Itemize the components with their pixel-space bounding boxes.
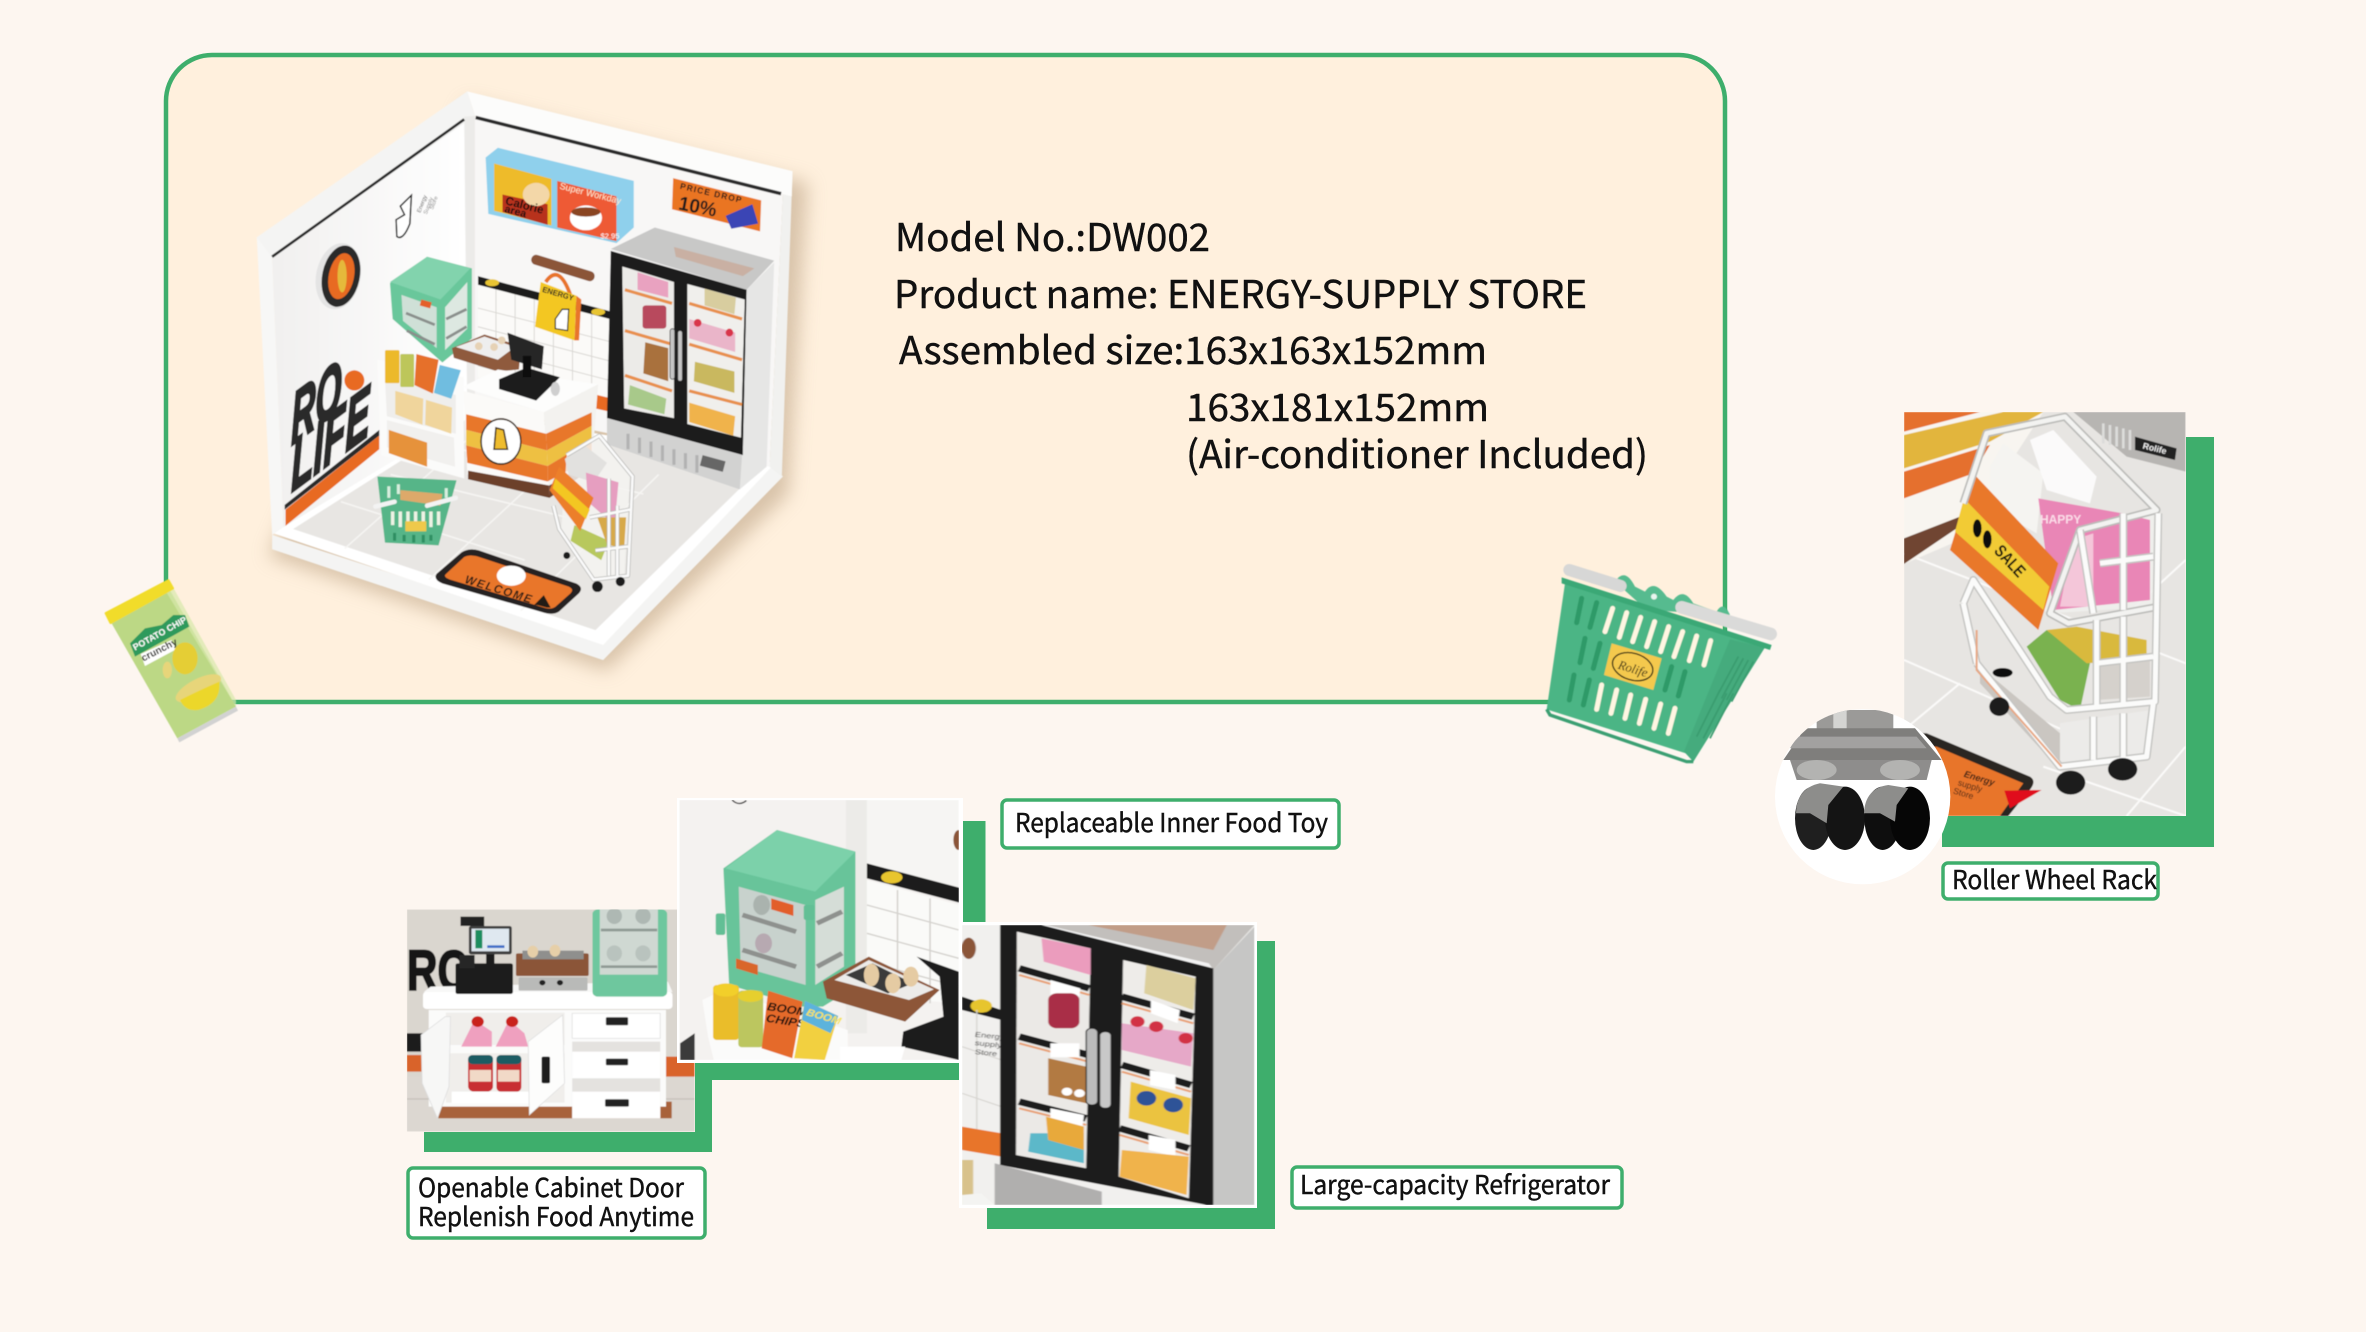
icon: potato chip can: crunchy [140, 637, 180, 664]
caption: cabinet door: Replenish Food Anytime [418, 1197, 694, 1234]
green frame [987, 941, 1275, 1229]
cart contents: SALE [1990, 541, 2030, 581]
white photo border [677, 798, 963, 1063]
shelf and snacks [702, 983, 848, 1060]
icon: green shopping basket: Rolife [1615, 658, 1650, 680]
wall clock [310, 239, 367, 314]
feature: openable cabinet door [407, 908, 712, 1238]
food warmer [390, 257, 472, 363]
green frame [1942, 437, 2214, 847]
RO LIFE lettering: LIFE [291, 369, 371, 508]
icon: green shopping basket [1547, 570, 1772, 762]
feature: large-capacity refrigerator [959, 922, 1622, 1229]
griddle on counter [516, 945, 589, 991]
caption: roller wheel rack: Roller Wheel Rack [1952, 860, 2158, 897]
photo: cabinet counter: RC [407, 939, 468, 1002]
green frame [424, 1063, 712, 1152]
welcome floor mat [436, 549, 581, 614]
floor mat: Energy [1963, 769, 1997, 788]
shelf unit with snacks [377, 350, 464, 478]
text block: product specifications [894, 207, 1648, 479]
lightbox signs: area [503, 203, 529, 221]
lightbox signs: $2.95 [600, 231, 620, 240]
griddle [823, 957, 940, 1022]
cart contents [1950, 430, 2157, 770]
shelf and snacks: BOOM [766, 1000, 809, 1019]
cash register [499, 333, 560, 401]
product name: Product name: ENERGY-SUPPLY STORE [894, 264, 1587, 319]
tiled wall band [478, 276, 613, 412]
rolling rack cart [550, 436, 633, 592]
wall logo: Energy [417, 194, 429, 214]
shopping basket [375, 477, 457, 545]
caption: cabinet door: Openable Cabinet Door [418, 1168, 685, 1205]
wall logo: Supply [423, 197, 435, 215]
hook rail [536, 260, 590, 276]
photo: rolling rack [1904, 412, 2186, 816]
RO LIFE lettering [291, 344, 371, 508]
wall logo: Store [429, 196, 440, 211]
griddle tray [452, 335, 521, 371]
shelf and snacks: BOOM [805, 1007, 844, 1028]
inset: caster wheels [1775, 709, 1950, 884]
panel: product information card [166, 55, 1725, 702]
illustration: miniature store diorama [257, 91, 808, 671]
feature: replaceable inner food toy [677, 798, 1339, 1080]
alternative size: 163x181x152mm [1186, 377, 1489, 432]
shopping bag [535, 275, 581, 340]
floor mat [1922, 732, 2042, 816]
caption: food toy: Replaceable Inner Food Toy [1015, 803, 1328, 840]
photo: refrigerator [962, 925, 1254, 1205]
photo: refrigerator: Store [974, 1048, 998, 1058]
assembled size: Assembled size:163x163x152mm [899, 320, 1487, 375]
shopping bag: ENERGY [541, 285, 576, 303]
checkout counter [462, 370, 598, 498]
cart contents: HAPPY [2040, 512, 2081, 526]
air-conditioner note: (Air-conditioner Included) [1186, 424, 1648, 479]
white photo border [959, 922, 1257, 1208]
price drop poster [672, 178, 761, 231]
refrigerator cabinet [995, 925, 1254, 1205]
register on counter [455, 917, 513, 994]
warmer on counter [592, 908, 667, 997]
warmer cabinet [716, 830, 855, 1007]
refrigerator [607, 228, 774, 489]
shelf and snacks: CHIPS [765, 1012, 807, 1030]
photo: refrigerator: supply [974, 1039, 1003, 1050]
photo: cabinet counter [407, 908, 695, 1132]
floor mat: supply [1957, 777, 1984, 794]
lightbox signs [486, 148, 634, 243]
model number: Model No.:DW002 [895, 207, 1210, 262]
RO LIFE lettering: RO [291, 344, 342, 461]
floor mat: Store [1952, 786, 1975, 801]
icon: potato chip can: POTATO CHIP [131, 615, 188, 652]
photo: rolling rack: Rolife [2142, 441, 2168, 456]
lightbox signs: Super Workday [559, 181, 623, 206]
feature: roller wheel rack [1775, 412, 2214, 899]
caption: cabinet door [408, 1168, 705, 1238]
cart frame [1963, 417, 2158, 767]
wall logo [396, 194, 440, 237]
register [901, 957, 959, 1060]
icon: potato chip can [106, 581, 238, 742]
price drop poster: 10% [677, 193, 718, 222]
green frame [695, 821, 986, 1080]
welcome floor mat: WELCOME [463, 574, 534, 607]
caption: refrigerator: Large-capacity Refrigerator [1300, 1165, 1611, 1202]
photo: food warmer [679, 800, 964, 1060]
price drop poster: PRICE DROP [679, 181, 744, 205]
photo: refrigerator: Energy [974, 1031, 1006, 1042]
lightbox signs: Calorie [504, 195, 545, 217]
